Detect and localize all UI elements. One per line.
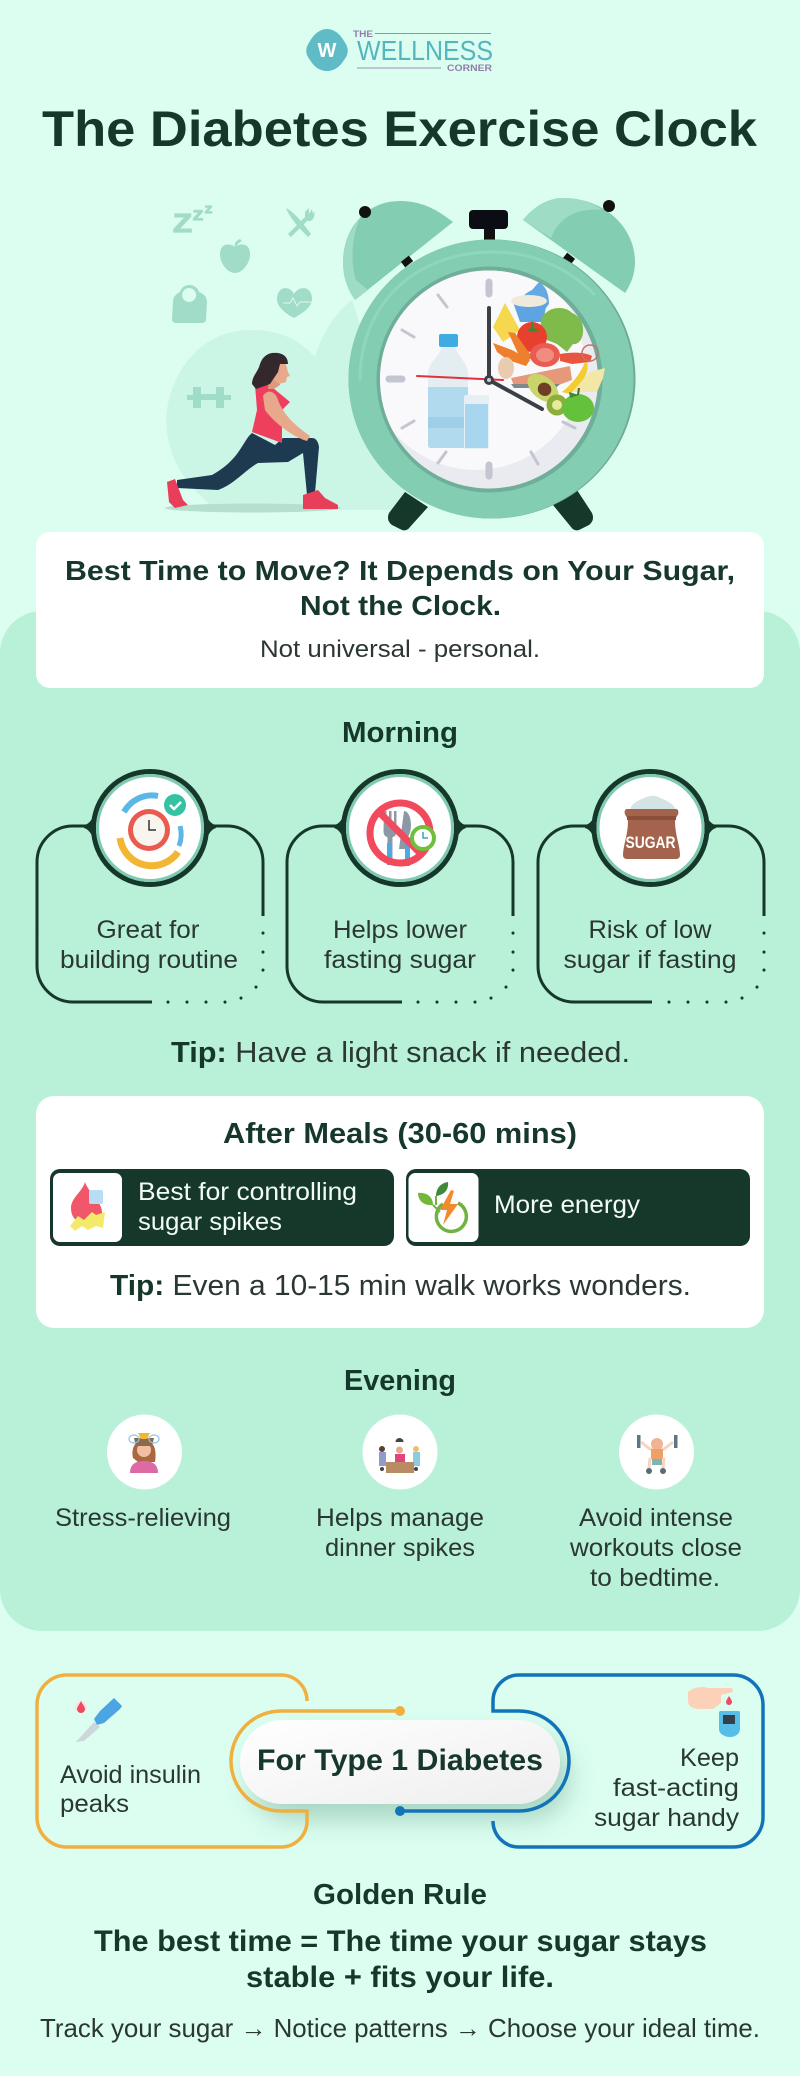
benefit: sugar spikes: Best for controlling [138, 1178, 357, 1206]
blue callout: sugar handy [594, 1804, 740, 1832]
icon: routine clock [120, 794, 186, 866]
icon: zzz [173, 205, 212, 238]
logo: CORNER [447, 63, 493, 73]
logo: W [318, 40, 337, 62]
heading: evening: Evening [344, 1365, 456, 1397]
panel: after meals [36, 1096, 764, 1328]
intro heading: Best Time to Move? It Depends on Your Sugar, [65, 555, 735, 586]
clock legs [388, 490, 593, 530]
evening item: bedtime [569, 1414, 742, 1592]
orange callout: Avoid insulin [60, 1761, 201, 1789]
evening item: stress relieving: Stress-relieving [55, 1504, 231, 1532]
intro subtext: Not universal - personal. [260, 636, 540, 663]
food cluster [493, 282, 605, 422]
intro heading: Not the Clock. [300, 590, 501, 621]
footer text: Track your sugar → Notice patterns → Choose your ideal time. [40, 2013, 760, 2043]
logo [306, 29, 493, 73]
text: fasting sugar [324, 946, 476, 974]
icon: cutlery [286, 208, 315, 237]
text [564, 916, 736, 974]
text: sugar if fasting [564, 946, 736, 974]
icon: heart [277, 288, 312, 318]
icon: glucose meter [688, 1687, 740, 1737]
evening item: bedtime: workouts close [569, 1534, 742, 1562]
heading: after meals: After Meals (30-60 mins) [223, 1118, 577, 1150]
heading: golden rule: Golden Rule [313, 1879, 487, 1911]
after meals tip: Tip: Even a 10-15 min walk works wonders. [110, 1270, 691, 1302]
icon: drop [70, 1182, 105, 1231]
evening item: dinner [316, 1414, 484, 1562]
logo: WELLNESS [357, 35, 493, 66]
icon: apple [220, 239, 250, 273]
icon: stressed woman [129, 1433, 159, 1473]
benefit: sugar spikes [50, 1169, 394, 1246]
icon: dumbbell [187, 387, 231, 408]
central pill: For Type 1 Diabetes [257, 1744, 543, 1777]
orange callout [37, 1675, 405, 1847]
central pill [240, 1720, 560, 1804]
text [324, 916, 476, 974]
golden rule statement [94, 1925, 707, 1994]
icon: insulin pen [75, 1698, 122, 1742]
orange callout: peaks [60, 1790, 129, 1818]
blue callout: Keep [680, 1744, 739, 1772]
water bottle and glass [428, 334, 489, 449]
clock hands [417, 308, 542, 409]
panel: type 1 diabetes [37, 1675, 763, 1847]
panel: intro card [36, 532, 764, 688]
intro heading [65, 555, 735, 621]
icon: no eating [370, 803, 434, 866]
icon: dinner table [379, 1438, 420, 1473]
icon: weighing scale [172, 285, 207, 323]
benefit: sugar spikes: sugar spikes [138, 1208, 282, 1236]
text [60, 916, 238, 974]
woman [165, 353, 341, 512]
panel: morning item 3 [538, 772, 764, 1002]
title: The Diabetes Exercise Clock [42, 101, 757, 157]
text: Great for [96, 916, 200, 944]
blue callout: fast-acting [613, 1774, 739, 1802]
icon: sugar sack [623, 796, 680, 859]
blue callout [395, 1675, 763, 1847]
clock bells [343, 198, 635, 300]
evening item: dinner: Helps manage [316, 1504, 484, 1532]
panel: morning item 2 [287, 772, 513, 1002]
panel: morning item 1 [37, 772, 263, 1002]
icon: energy [418, 1182, 466, 1231]
icon: zzz: Z [193, 207, 204, 223]
hero illustration: woman and alarm clock [165, 198, 636, 530]
icon: sugar sack: SUGAR [626, 833, 676, 852]
evening item: stress relieving [55, 1414, 231, 1532]
green content section background [0, 611, 800, 1631]
health icons [172, 205, 316, 408]
evening item: bedtime: to bedtime. [590, 1564, 720, 1592]
benefit: more energy: More energy [494, 1191, 641, 1219]
background hill [166, 300, 420, 510]
evening item: dinner: dinner spikes [325, 1534, 475, 1562]
evening item: bedtime: Avoid intense [579, 1504, 733, 1532]
golden rule statement: stable + fits your life. [246, 1961, 554, 1994]
icon: zzz: Z [205, 205, 212, 216]
clock top button [469, 210, 508, 241]
icon: zzz: Z [173, 208, 192, 238]
icon: weightlifter [637, 1435, 678, 1474]
text: Helps lower [333, 916, 467, 944]
heading: morning: Morning [342, 717, 458, 749]
benefit: more energy [406, 1169, 750, 1246]
morning tip: Tip: Have a light snack if needed. [171, 1037, 630, 1069]
golden rule statement: The best time = The time your sugar stays [94, 1925, 707, 1958]
text: building routine [60, 946, 238, 974]
logo: THE [353, 29, 373, 39]
text: Risk of low [588, 916, 712, 944]
clock body [348, 240, 636, 518]
